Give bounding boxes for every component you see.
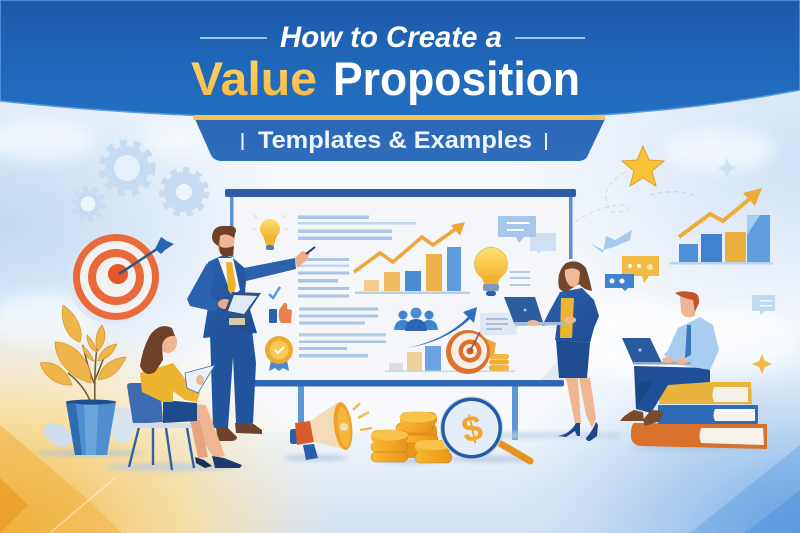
- hands: [527, 320, 539, 326]
- presenter woman with laptop: [500, 261, 620, 441]
- presenter man: [187, 226, 315, 441]
- shirt and tie: [218, 258, 240, 297]
- trousers: [634, 366, 710, 413]
- shirt: [664, 317, 719, 370]
- award badge: [265, 336, 293, 371]
- subtitle pipes: [242, 133, 547, 150]
- text lines upper: [298, 216, 416, 358]
- middle blue book: [658, 405, 758, 424]
- skirt: [163, 400, 197, 423]
- dollar sign: $: [458, 406, 486, 451]
- gear icons: [72, 143, 206, 220]
- board frame and legs: [225, 189, 576, 440]
- plant in blue pot: [35, 305, 145, 456]
- bar chart on board: [354, 222, 470, 294]
- laptop: [622, 338, 662, 363]
- notepad: [185, 365, 215, 393]
- right bar chart: [670, 188, 773, 264]
- gear: small: [72, 188, 104, 220]
- dashed flight path and paper plane: [575, 172, 695, 222]
- pointing arm: [244, 258, 296, 281]
- presentation board: [225, 189, 576, 440]
- board panel: [232, 197, 572, 381]
- checkmark blue right: [590, 230, 632, 253]
- small bars: [385, 346, 515, 372]
- header band: [0, 0, 800, 120]
- top: [560, 298, 574, 338]
- title rule left: [200, 37, 267, 39]
- trousers: [210, 330, 256, 428]
- small lightbulb: [252, 215, 288, 250]
- head: [218, 232, 235, 256]
- top yellow book: [659, 382, 752, 404]
- front stack: [415, 440, 452, 463]
- legs: [190, 404, 225, 458]
- speech bubbles on board: [498, 216, 556, 254]
- title line 1: How to Create a: [280, 21, 502, 54]
- jacket: [203, 255, 257, 338]
- checkmark: [269, 287, 280, 298]
- gear: large: [102, 143, 152, 193]
- magnifying glass with dollar: [440, 397, 530, 462]
- title line 2 b: Proposition: [333, 52, 580, 105]
- laptop: [504, 297, 543, 323]
- head and hair: [159, 331, 177, 353]
- gold rule: [193, 115, 605, 120]
- gear: right: [162, 170, 206, 214]
- far leg: [634, 366, 655, 412]
- head and hair: [680, 296, 696, 317]
- book stack: [630, 382, 770, 451]
- seated man with laptop: [620, 291, 719, 426]
- star: [622, 146, 664, 186]
- shoes: [216, 428, 237, 441]
- target with arrow: [68, 234, 174, 324]
- floor shadow: [500, 432, 620, 439]
- holding arm: [187, 263, 220, 312]
- jacket: [542, 288, 599, 343]
- chat bubbles right: [605, 256, 659, 291]
- title line 2: Value: [191, 52, 317, 105]
- legs: [566, 378, 581, 424]
- coin stacks: [371, 412, 452, 464]
- megaphone: [283, 401, 372, 461]
- clipboard: [224, 292, 261, 317]
- growth arrow blue: [407, 307, 477, 348]
- subtitle text: Templates & Examples: [258, 127, 532, 154]
- heels: [558, 423, 580, 437]
- large lightbulb: [474, 248, 530, 296]
- sparkle blue: [717, 158, 737, 178]
- target and coins on board: [446, 330, 509, 374]
- back stack: [396, 412, 438, 458]
- team icon: [394, 308, 438, 331]
- shoes: [620, 410, 644, 421]
- sparkle gold: [752, 354, 772, 374]
- sweater: [140, 363, 200, 402]
- subtitle banner: [193, 115, 605, 161]
- left stack: [371, 430, 408, 462]
- chair: [127, 383, 194, 470]
- title: [191, 21, 585, 105]
- skirt: [556, 340, 590, 378]
- light chat bubble: [752, 295, 775, 315]
- seated woman on chair: [105, 326, 242, 471]
- head and hair: [558, 261, 592, 292]
- thumbs up: [269, 303, 292, 323]
- note card: [480, 313, 517, 335]
- title rule right: [515, 37, 585, 39]
- shoes: [212, 456, 242, 468]
- bottom orange book: [631, 423, 767, 449]
